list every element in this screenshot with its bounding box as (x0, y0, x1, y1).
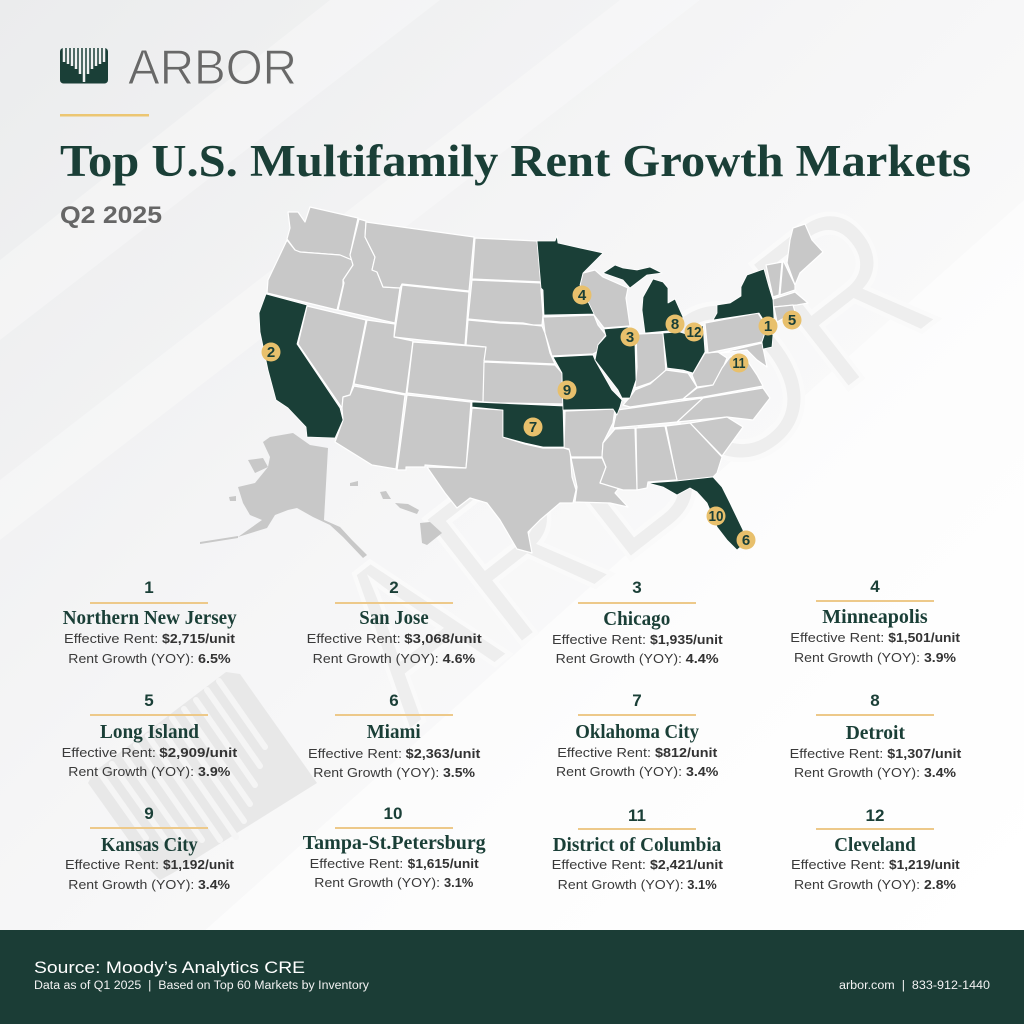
map markers: 7 (529, 419, 537, 436)
market 2: San Jose: 2 (389, 578, 399, 597)
market 8: Detroit: 8 (870, 691, 880, 710)
data note: Data as of Q1 2025 | Based on Top 60 Markets by Inventory (34, 980, 369, 992)
market 2: San Jose: San Jose (359, 607, 429, 629)
market 7: Oklahoma City: $812/unit (655, 745, 718, 760)
map: United States (200, 207, 823, 558)
market 6: Miami: 3.5% (443, 765, 475, 780)
market 1: Northern New Jersey: $2,715/unit (162, 631, 236, 646)
map markers: 9 (563, 382, 571, 399)
footer band (0, 930, 1024, 1024)
logo: Arbor (60, 41, 297, 95)
wordmark: ARBOR (128, 41, 297, 95)
market 9: Kansas City: Kansas City (101, 834, 198, 856)
subtitle: Q2 2025 (60, 202, 162, 229)
market 12: Cleveland: Effective Rent: (791, 857, 885, 872)
market 11: District of Columbia: Rent Growth (YOY): (558, 877, 684, 892)
market 7: Oklahoma City: 3.4% (686, 764, 719, 779)
map markers: 8 (671, 316, 679, 333)
market 2: San Jose (307, 578, 482, 666)
market 11: District of Columbia: District of Columbia (553, 834, 721, 856)
map markers: 4 (578, 287, 587, 304)
market 11: District of Columbia: Effective Rent: (552, 857, 646, 872)
market 1: Northern New Jersey: 6.5% (198, 651, 231, 666)
market 3: Chicago (552, 578, 723, 666)
market 6: Miami: $2,363/unit (406, 746, 481, 761)
market 12: Cleveland: 2.8% (924, 877, 956, 892)
states without a ranked market (267, 207, 823, 553)
market 2: San Jose: 4.6% (443, 651, 476, 666)
market 12: Cleveland: $1,219/unit (889, 857, 960, 872)
market 3: Chicago: Rent Growth (YOY): (556, 651, 682, 666)
map markers: 1 (764, 318, 772, 335)
market 9: Kansas City: Effective Rent: (65, 857, 159, 872)
market 11: District of Columbia: 3.1% (687, 877, 717, 892)
map markers: 11 (732, 355, 746, 372)
market 4: Minneapolis: Minneapolis (822, 606, 928, 628)
market 6: Miami: 6 (389, 691, 399, 710)
market 10: Tampa-St.Petersburg (303, 804, 486, 890)
Alaska (200, 433, 367, 558)
market 9: Kansas City (65, 804, 235, 892)
accent line (60, 114, 149, 116)
market 5: Long Island: Rent Growth (YOY): (68, 764, 194, 779)
market 7: Oklahoma City: 7 (632, 691, 642, 710)
market 1: Northern New Jersey: Rent Growth (YOY): (68, 651, 194, 666)
title: Top U.S. Multifamily Rent Growth Markets (60, 136, 971, 186)
market 4: Minneapolis: Rent Growth (YOY): (794, 650, 920, 665)
market 6: Miami (308, 691, 481, 780)
map markers: 3 (626, 329, 634, 346)
market 1: Northern New Jersey (63, 578, 237, 666)
market 8: Detroit: 3.4% (924, 765, 956, 780)
market 3: Chicago: Chicago (603, 608, 670, 630)
contact: arbor.com | 833-912-1440 (839, 980, 990, 992)
market 5: Long Island (62, 691, 238, 779)
map markers: 12 (686, 324, 702, 341)
market 2: San Jose: Effective Rent: (307, 631, 401, 646)
market 12: Cleveland: Rent Growth (YOY): (794, 877, 920, 892)
market 10: Tampa-St.Petersburg: 3.1% (444, 875, 474, 890)
icon: Arbor tree mark (60, 48, 108, 84)
market 10: Tampa-St.Petersburg: 10 (384, 804, 402, 823)
market 9: Kansas City: 3.4% (198, 877, 230, 892)
watermark: logo icon (88, 672, 317, 880)
map markers: 10 (708, 508, 724, 525)
market 5: Long Island: 3.9% (198, 764, 231, 779)
market 7: Oklahoma City: Oklahoma City (575, 721, 699, 743)
market 6: Miami: Miami (367, 721, 421, 743)
market 5: Long Island: 5 (144, 691, 154, 710)
market 7: Oklahoma City: Rent Growth (YOY): (556, 764, 682, 779)
market 3: Chicago: Effective Rent: (552, 632, 646, 647)
market 11: District of Columbia: $2,421/unit (650, 857, 724, 872)
market 8: Detroit: Detroit (846, 722, 905, 744)
market 7: Oklahoma City (556, 691, 719, 779)
market 8: Detroit: Rent Growth (YOY): (794, 765, 920, 780)
market 10: Tampa-St.Petersburg: Tampa-St.Petersburg (303, 832, 486, 854)
market 3: Chicago: 4.4% (686, 651, 719, 666)
market 8: Detroit (790, 691, 962, 780)
market 6: Miami: Rent Growth (YOY): (313, 765, 439, 780)
market 4: Minneapolis (790, 577, 961, 665)
market 1: Northern New Jersey: Northern New Jersey (63, 607, 237, 629)
map markers: 5 (788, 312, 796, 329)
market 11: District of Columbia: 11 (628, 806, 646, 825)
map markers: 2 (267, 344, 275, 361)
market 12: Cleveland (791, 806, 960, 892)
market 9: Kansas City: $1,192/unit (163, 857, 235, 872)
market 3: Chicago: 3 (632, 578, 642, 597)
market 12: Cleveland: Cleveland (834, 834, 916, 856)
Hawaii (350, 481, 442, 545)
market 4: Minneapolis: Effective Rent: (790, 630, 884, 645)
market 8: Detroit: $1,307/unit (887, 746, 962, 761)
market 11: District of Columbia (552, 806, 724, 892)
market 6: Miami: Effective Rent: (308, 746, 402, 761)
market 8: Detroit: Effective Rent: (790, 746, 883, 761)
source: Source: Moody’s Analytics CRE (34, 958, 305, 977)
market 5: Long Island: Long Island (100, 721, 199, 743)
highlighted states (259, 236, 774, 550)
market 1: Northern New Jersey: 1 (144, 578, 154, 597)
market 2: San Jose: Rent Growth (YOY): (313, 651, 439, 666)
market 9: Kansas City: Rent Growth (YOY): (68, 877, 194, 892)
market 5: Long Island: Effective Rent: (62, 745, 156, 760)
market 4: Minneapolis: $1,501/unit (888, 630, 961, 645)
market 10: Tampa-St.Petersburg: Effective Rent: (310, 856, 403, 871)
market 9: Kansas City: 9 (144, 804, 154, 823)
market 4: Minneapolis: 3.9% (924, 650, 956, 665)
market 2: San Jose: $3,068/unit (404, 631, 482, 646)
market 10: Tampa-St.Petersburg: $1,615/unit (408, 856, 479, 871)
map markers: 6 (742, 532, 750, 549)
market 5: Long Island: $2,909/unit (159, 745, 238, 760)
market 4: Minneapolis: 4 (870, 577, 880, 596)
market 12: Cleveland: 12 (866, 806, 884, 825)
market 3: Chicago: $1,935/unit (650, 632, 723, 647)
market 10: Tampa-St.Petersburg: Rent Growth (YOY): (314, 875, 440, 890)
map markers (262, 286, 802, 550)
market 1: Northern New Jersey: Effective Rent: (64, 631, 158, 646)
market 7: Oklahoma City: Effective Rent: (557, 745, 651, 760)
